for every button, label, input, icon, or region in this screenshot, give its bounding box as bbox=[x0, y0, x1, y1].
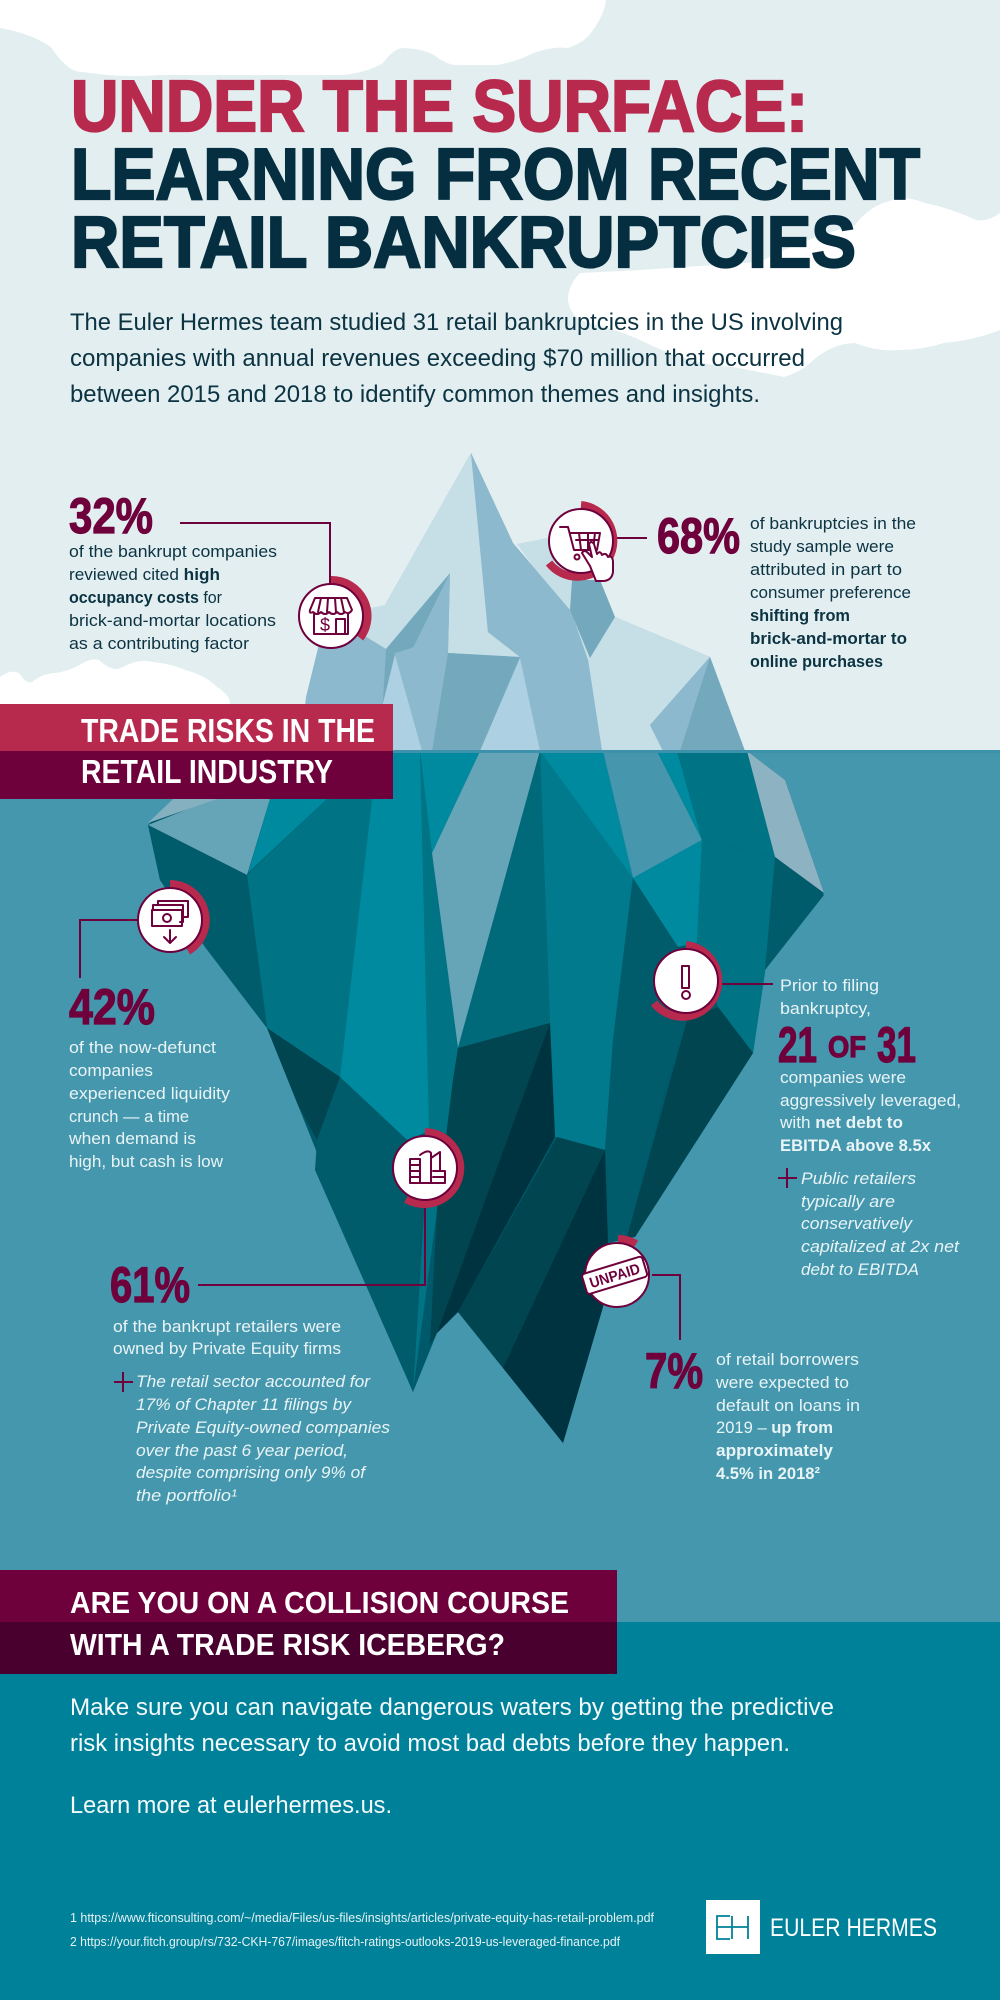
icon: unpaid stamp: UNPAID bbox=[588, 1261, 642, 1292]
stat: 32%: brick-and-mortar locations bbox=[69, 611, 276, 630]
stat: 42%: experienced liquidity bbox=[69, 1084, 231, 1103]
stat: 68% bbox=[613, 508, 916, 671]
plus note: capitalized at 2x net bbox=[801, 1237, 960, 1256]
stat: 7%: 2019 – up from bbox=[716, 1418, 833, 1437]
cloud: left small bbox=[0, 659, 230, 704]
connector line bbox=[652, 1275, 680, 1340]
icon: buildings bbox=[393, 1132, 460, 1204]
stat: 21 of 31: aggressively leveraged, bbox=[780, 1091, 961, 1110]
stat: 42%: high, but cash is low bbox=[69, 1152, 224, 1171]
stat: 32%: occupancy costs for bbox=[69, 588, 222, 607]
stat: 42%: when demand is bbox=[68, 1129, 196, 1148]
title: LEARNING FROM RECENT bbox=[71, 135, 920, 215]
intro text: The Euler Hermes team studied 31 retail bankruptcies in the US involving bbox=[70, 309, 843, 336]
stat: 7%: of retail borrowers bbox=[716, 1350, 859, 1369]
plus note: the portfolio¹ bbox=[136, 1486, 237, 1505]
title bbox=[71, 67, 920, 283]
stat: 7%: default on loans in bbox=[716, 1396, 860, 1415]
plus note: The retail sector accounted for bbox=[136, 1372, 371, 1391]
stat: 7%: 4.5% in 2018² bbox=[716, 1464, 820, 1483]
icon: store bbox=[299, 580, 368, 648]
stat: 68%: consumer preference bbox=[750, 583, 911, 602]
call to action text: Make sure you can navigate dangerous waters by getting the predictive bbox=[70, 1694, 834, 1721]
waterline bbox=[0, 750, 1000, 753]
stat: 68%: 68% bbox=[657, 508, 740, 564]
stat: 32%: of the bankrupt companies bbox=[69, 542, 277, 561]
plus note: despite comprising only 9% of bbox=[136, 1463, 367, 1482]
icon: exclamation bbox=[654, 945, 718, 1017]
connector line bbox=[80, 920, 137, 978]
banner: collision course bbox=[0, 1570, 617, 1674]
stat: 42%: crunch — a time bbox=[69, 1107, 189, 1126]
stat: 7%: were expected to bbox=[715, 1373, 849, 1392]
iceberg above water bbox=[300, 453, 745, 751]
sea background bbox=[0, 750, 1000, 1622]
plus note bbox=[114, 1372, 391, 1505]
banner: collision course: WITH A TRADE RISK ICEBERG? bbox=[70, 1627, 505, 1662]
stat: 68%: of bankruptcies in the bbox=[750, 514, 916, 533]
logo: Euler Hermes: EULER HERMES bbox=[770, 1914, 937, 1942]
plus note: Private Equity-owned companies bbox=[136, 1418, 391, 1437]
stat: 21 of 31 bbox=[720, 976, 961, 1279]
intro text: companies with annual revenues exceeding $70 million that occurred bbox=[70, 345, 805, 372]
stat: 21 of 31: bankruptcy, bbox=[780, 999, 871, 1018]
banner: trade risks bbox=[0, 704, 393, 799]
banner: collision course: ARE YOU ON A COLLISION COURSE bbox=[70, 1585, 569, 1620]
cloud: top bbox=[0, 0, 606, 76]
call to action text bbox=[70, 1694, 834, 1819]
stat: 32%: reviewed cited high bbox=[69, 565, 220, 584]
footnotes: 2 https://your.fitch.group/rs/732-CKH-767/images/fitch-ratings-outlooks-2019-us-leveraged-finance.pdf bbox=[70, 1934, 620, 1949]
connector line bbox=[198, 1202, 425, 1285]
stat: 61%: of the bankrupt retailers were bbox=[113, 1317, 341, 1336]
stat: 68%: attributed in part to bbox=[750, 560, 902, 579]
plus note bbox=[778, 1168, 960, 1279]
stat: 68%: brick-and-mortar to bbox=[750, 629, 907, 648]
connector line bbox=[613, 537, 647, 539]
title: UNDER THE SURFACE: bbox=[71, 67, 808, 147]
call to action text: Learn more at eulerhermes.us. bbox=[70, 1792, 392, 1819]
stat: 21 of 31: OF bbox=[828, 1031, 866, 1064]
banner: trade risks: TRADE RISKS IN THE bbox=[81, 712, 375, 749]
stat: 32%: 32% bbox=[69, 488, 153, 544]
icon: unpaid stamp bbox=[581, 1239, 649, 1307]
plus note: debt to EBITDA bbox=[801, 1260, 919, 1279]
stat: 42%: companies bbox=[69, 1061, 153, 1080]
stat: 32% bbox=[69, 488, 330, 653]
icon: store: $ bbox=[320, 615, 330, 635]
icon: shopping cart bbox=[549, 505, 613, 581]
banner: trade risks: RETAIL INDUSTRY bbox=[81, 753, 333, 790]
logo: Euler Hermes bbox=[706, 1900, 937, 1954]
stat: 7%: 7% bbox=[645, 1343, 703, 1399]
iceberg bbox=[148, 453, 824, 1443]
stat: 61%: owned by Private Equity firms bbox=[113, 1339, 341, 1358]
plus note: typically are bbox=[801, 1192, 895, 1211]
plus note: over the past 6 year period, bbox=[136, 1441, 348, 1460]
stat: 7% bbox=[645, 1275, 860, 1483]
call to action text: risk insights necessary to avoid most bad debts before they happen. bbox=[70, 1730, 790, 1757]
iceberg below water bbox=[148, 751, 824, 1443]
connector line bbox=[180, 523, 330, 584]
stat: 42%: of the now-defunct bbox=[69, 1038, 216, 1057]
stat: 61%: 61% bbox=[110, 1257, 190, 1313]
stat: 68%: study sample were bbox=[750, 537, 894, 556]
stat: 68%: online purchases bbox=[750, 652, 883, 671]
stat: 61% bbox=[110, 1202, 425, 1505]
stat: 21 of 31: 21 bbox=[778, 1017, 817, 1073]
deep water footer background bbox=[0, 1622, 1000, 2000]
stat: 21 of 31: companies were bbox=[780, 1068, 906, 1087]
connector line bbox=[720, 983, 773, 985]
stat: 21 of 31: 31 bbox=[877, 1017, 916, 1073]
icon: cash down bbox=[138, 884, 206, 952]
footnotes bbox=[70, 1910, 654, 1949]
stat: 21 of 31: with net debt to bbox=[779, 1113, 903, 1132]
cloud: right bbox=[568, 198, 1000, 377]
stat: 21 of 31: EBITDA above 8.5x bbox=[780, 1136, 932, 1155]
stat: 42%: 42% bbox=[69, 979, 155, 1035]
plus note: Public retailers bbox=[801, 1169, 917, 1188]
stat: 21 of 31: Prior to filing bbox=[780, 976, 879, 995]
title: RETAIL BANKRUPTCIES bbox=[71, 203, 856, 283]
intro text: between 2015 and 2018 to identify common themes and insights. bbox=[70, 381, 760, 408]
footnotes: 1 https://www.fticonsulting.com/~/media/Files/us-files/insights/articles/private-equity-has-retail-problem.pdf bbox=[70, 1910, 654, 1925]
plus note: conservatively bbox=[801, 1214, 914, 1233]
sky background bbox=[0, 0, 1000, 751]
stat: 42% bbox=[68, 920, 231, 1171]
stat: 7%: approximately bbox=[716, 1441, 834, 1460]
stat: 68%: shifting from bbox=[750, 606, 850, 625]
plus note: 17% of Chapter 11 filings by bbox=[136, 1395, 353, 1414]
intro text bbox=[70, 309, 843, 408]
stat: 32%: as a contributing factor bbox=[69, 634, 249, 653]
